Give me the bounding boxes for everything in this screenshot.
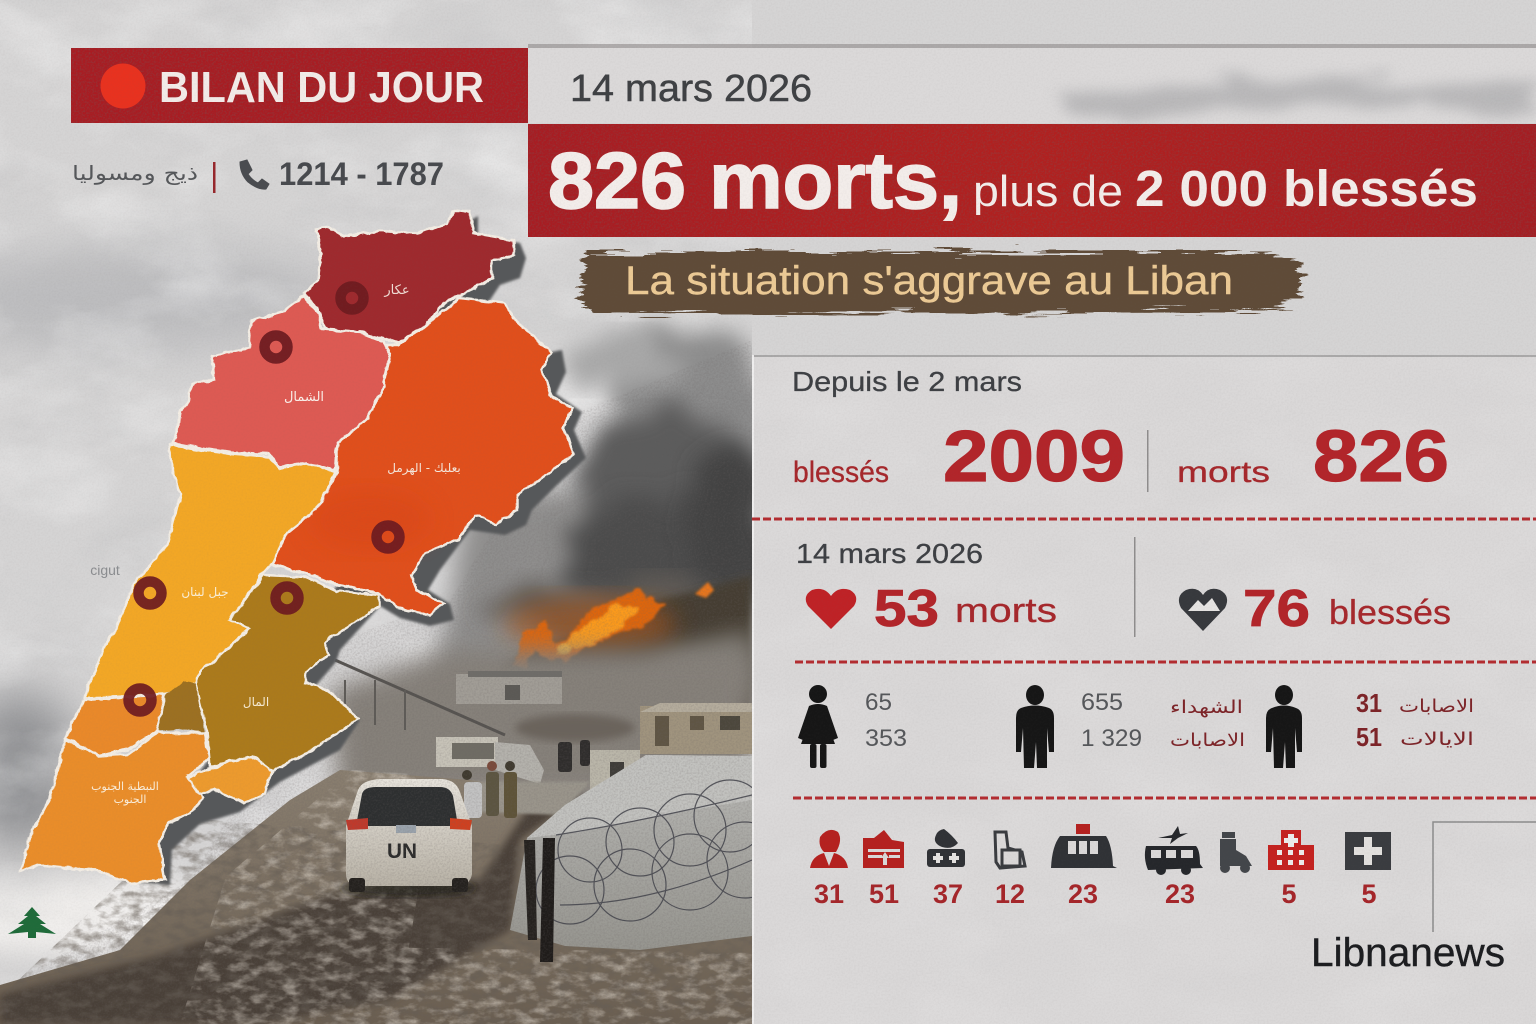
region: upper South xyxy=(65,695,165,756)
icon counts: 23 xyxy=(1165,879,1195,909)
totals row: 2009 xyxy=(943,417,1125,497)
icon: man xyxy=(1266,685,1302,768)
icon: red dot xyxy=(100,64,146,108)
icon counts: 31 xyxy=(814,879,844,909)
label: Beirut: cigut xyxy=(90,562,120,578)
demographics row: 31 xyxy=(1356,688,1382,718)
icon counts: 5 xyxy=(1361,879,1377,909)
map markers xyxy=(128,286,400,712)
totals row: blessés xyxy=(793,456,889,489)
demographics row: الايالات xyxy=(1400,729,1474,750)
demographics row xyxy=(798,685,1474,768)
headline band: plus de xyxy=(973,167,1123,216)
icon row with counts xyxy=(810,824,1391,909)
date band: 14 mars 2026 xyxy=(570,68,812,110)
icon: first aid square xyxy=(1345,832,1391,870)
region: Baalbek-Hermel xyxy=(270,298,574,615)
totals row: morts xyxy=(1177,456,1270,489)
icon counts: 5 xyxy=(1281,879,1297,909)
brand: Libnanews: Libnanews xyxy=(1311,931,1505,975)
region: North xyxy=(172,296,390,470)
icon: dark heart with rubble xyxy=(1179,589,1227,631)
region label: Akkar: عكار xyxy=(383,283,410,298)
icon: damaged building xyxy=(863,830,904,868)
region label: Baalbek-Hermel: بعلبك - الهرمل xyxy=(387,461,461,476)
icon counts xyxy=(814,879,1377,909)
middle ground hazy town xyxy=(330,650,752,800)
daily row: 53 xyxy=(874,580,939,638)
contact line xyxy=(72,156,444,193)
bunker tent with barbed wire xyxy=(510,755,752,962)
icon: truck xyxy=(1220,832,1252,873)
contact line: ذيج ومسوليا xyxy=(72,161,198,185)
daily row: 76 xyxy=(1243,580,1310,638)
region: Mount Lebanon xyxy=(84,445,335,698)
heading: since 2 March: Depuis le 2 mars xyxy=(792,366,1022,397)
demographics row: 65 xyxy=(865,689,892,716)
demographics row: الاصابات xyxy=(1170,730,1245,751)
icon: phone xyxy=(240,160,269,189)
icon counts: 37 xyxy=(933,879,963,909)
icon: cedar xyxy=(8,907,56,938)
panel: statistics xyxy=(752,355,1536,1024)
subtitle on brush stroke xyxy=(578,252,1302,314)
soldiers and people xyxy=(462,740,590,818)
photo: conflict scene behind map xyxy=(0,325,783,1024)
icon: red heart xyxy=(806,589,856,629)
totals row xyxy=(793,417,1449,497)
subtitle on brush stroke: La situation s'aggrave au Liban xyxy=(625,259,1233,303)
demographics row: الشهداء xyxy=(1170,697,1243,718)
icon: bus with airplane xyxy=(1145,826,1203,875)
region label: North: الشمال xyxy=(284,390,324,405)
region: South: الجنوب xyxy=(114,793,146,806)
region: South xyxy=(21,733,209,883)
icon: ambulance bus xyxy=(1051,824,1117,868)
icon: medical kit xyxy=(927,829,965,867)
icon counts: 51 xyxy=(869,879,899,909)
headline band xyxy=(528,124,1536,237)
daily row: 14 mars 2026 xyxy=(796,538,983,569)
contact line: 1214 - 1787 xyxy=(279,156,444,192)
header: Bilan du jour: BILAN DU JOUR xyxy=(159,63,484,112)
icon counts: 12 xyxy=(995,879,1025,909)
demographics row: 1 329 xyxy=(1081,725,1142,752)
totals row: 826 xyxy=(1313,417,1449,497)
map of Lebanon with governorates xyxy=(8,211,586,938)
ground and road xyxy=(0,760,752,1024)
icon counts: 23 xyxy=(1068,879,1098,909)
icon: woman xyxy=(798,685,838,768)
region: Akkar xyxy=(304,211,513,343)
headline band: 2 000 blessés xyxy=(1135,160,1478,217)
region: Beqaa xyxy=(195,575,379,771)
icon: man xyxy=(1016,685,1054,768)
region label: South: النبطية الجنوب xyxy=(91,780,159,793)
date band xyxy=(528,44,1536,123)
icon: hospital xyxy=(1268,830,1314,870)
region: Nabatieh patch xyxy=(188,756,272,803)
demographics row: 51 xyxy=(1356,722,1382,752)
headline band: 826 morts, xyxy=(548,136,962,225)
header: Bilan du jour xyxy=(71,48,528,123)
burning hillside xyxy=(500,575,752,715)
icon: official xyxy=(810,830,848,868)
demographics row: 655 xyxy=(1081,689,1123,716)
daily row: blessés xyxy=(1329,594,1451,632)
region: Beirut suburb xyxy=(157,682,205,733)
daily row xyxy=(796,537,1451,638)
demographics row: الاصابات xyxy=(1399,696,1474,717)
UN lettering: UN xyxy=(387,840,417,863)
fence posts xyxy=(524,840,537,940)
logo frame lines xyxy=(1433,822,1536,932)
daily row: morts xyxy=(955,592,1057,630)
region label: Beqaa: المال xyxy=(243,695,269,709)
UN vehicle xyxy=(340,779,476,897)
region label: Mount Lebanon: جبل لبنان xyxy=(181,585,229,599)
demographics row: 353 xyxy=(865,725,907,752)
smoke sky xyxy=(427,313,752,666)
map shadow xyxy=(120,216,586,885)
icon: fuel device xyxy=(995,832,1025,868)
